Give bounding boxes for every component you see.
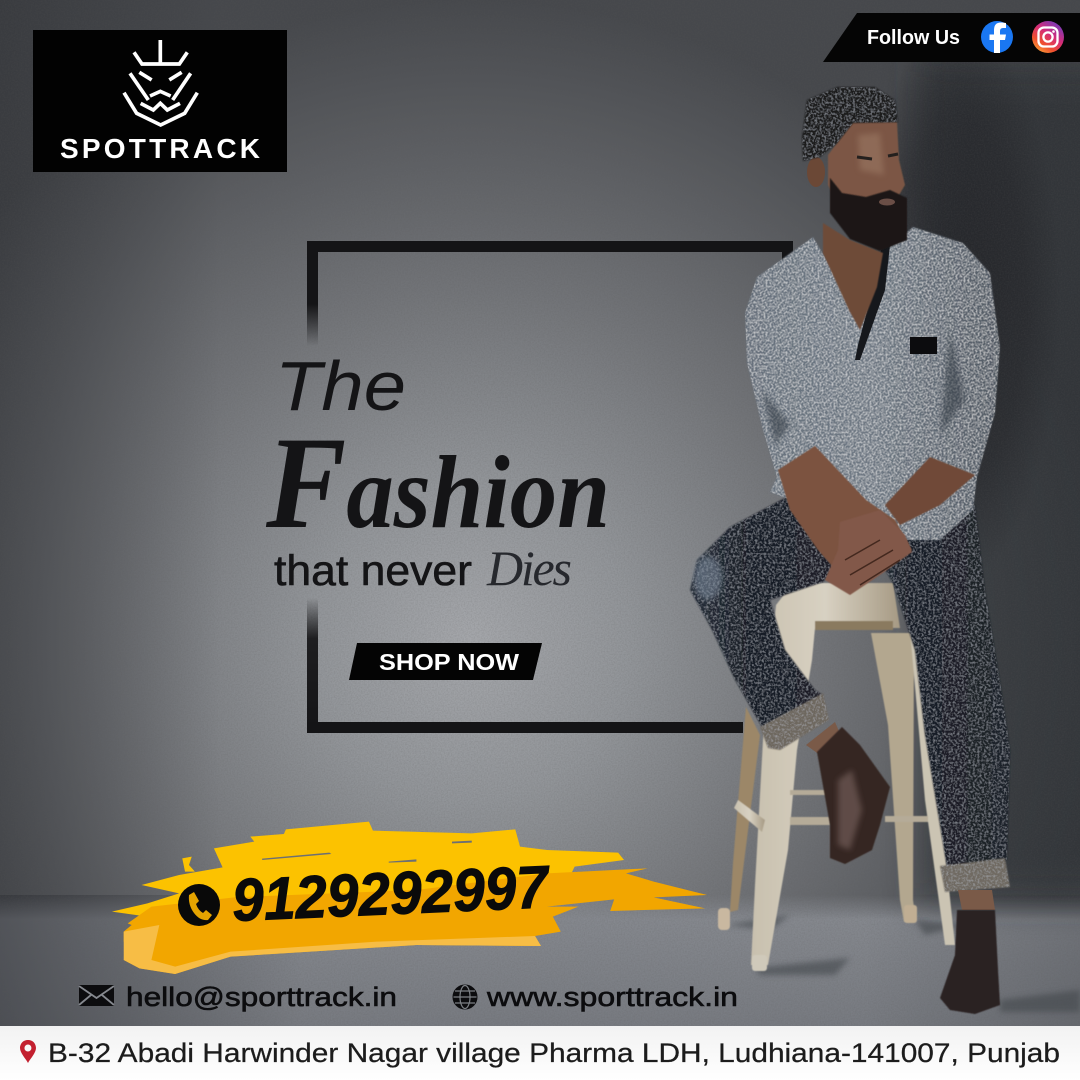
chest skin <box>823 223 883 330</box>
icon: envelope <box>79 985 114 1006</box>
email contact <box>79 982 397 1012</box>
person on stool <box>690 87 1080 1014</box>
shirt <box>745 227 1000 540</box>
that never: that never <box>274 547 472 595</box>
square frame outline <box>307 241 793 733</box>
floor shadows <box>725 915 1080 1012</box>
neck and face <box>828 122 905 210</box>
right ankle <box>958 890 995 910</box>
right trouser cuff <box>940 858 1010 892</box>
right forearm <box>885 457 975 525</box>
icon: instagram <box>1032 21 1064 53</box>
lips <box>879 198 895 206</box>
left leg jeans <box>690 490 895 727</box>
website address: www.sporttrack.in <box>486 982 738 1012</box>
follow us label: Follow Us <box>867 26 960 49</box>
shirt chest label <box>910 337 937 354</box>
left ankle <box>806 722 845 755</box>
beard <box>830 178 907 251</box>
logo wordmark: SPOTTRACK <box>60 133 260 164</box>
finger lines <box>845 540 900 585</box>
logo panel <box>33 30 287 172</box>
eyes <box>857 154 898 159</box>
icon: crowned lion <box>124 40 197 125</box>
icon: globe <box>454 986 476 1008</box>
denim highlight <box>694 556 722 600</box>
hair <box>802 87 898 161</box>
fashion: Fashion <box>265 409 610 556</box>
dies: Dies <box>486 540 572 596</box>
the: The <box>275 347 406 425</box>
stool <box>718 583 955 971</box>
follow us bar <box>823 13 1080 62</box>
headline <box>265 347 610 596</box>
shop now button: SHOP NOW <box>379 649 519 675</box>
paint brush phone banner <box>112 822 707 974</box>
left trouser cuff <box>760 693 829 750</box>
icon: phone <box>178 884 220 926</box>
icon: facebook <box>981 21 1013 53</box>
left forearm <box>778 446 912 575</box>
face highlights <box>858 133 884 175</box>
left boot <box>817 727 890 864</box>
left boot shine <box>838 770 862 850</box>
hands <box>825 510 912 595</box>
website contact <box>454 982 738 1012</box>
right leg jeans <box>870 505 1010 868</box>
address text: B-32 Abadi Harwinder Nagar village Pharma LDH, Ludhiana-141007, Punjab <box>48 1038 1060 1068</box>
right boot <box>940 910 1000 1014</box>
yellow brush <box>112 822 707 974</box>
phone number: 9129292997 <box>231 853 552 934</box>
email address: hello@sporttrack.in <box>126 982 397 1012</box>
address bar <box>0 1026 1080 1080</box>
shirt placket and collar <box>855 245 890 360</box>
sleeve shadow <box>762 330 965 445</box>
icon: map pin <box>20 1040 36 1063</box>
shop now button <box>349 643 542 680</box>
ear <box>807 157 825 187</box>
